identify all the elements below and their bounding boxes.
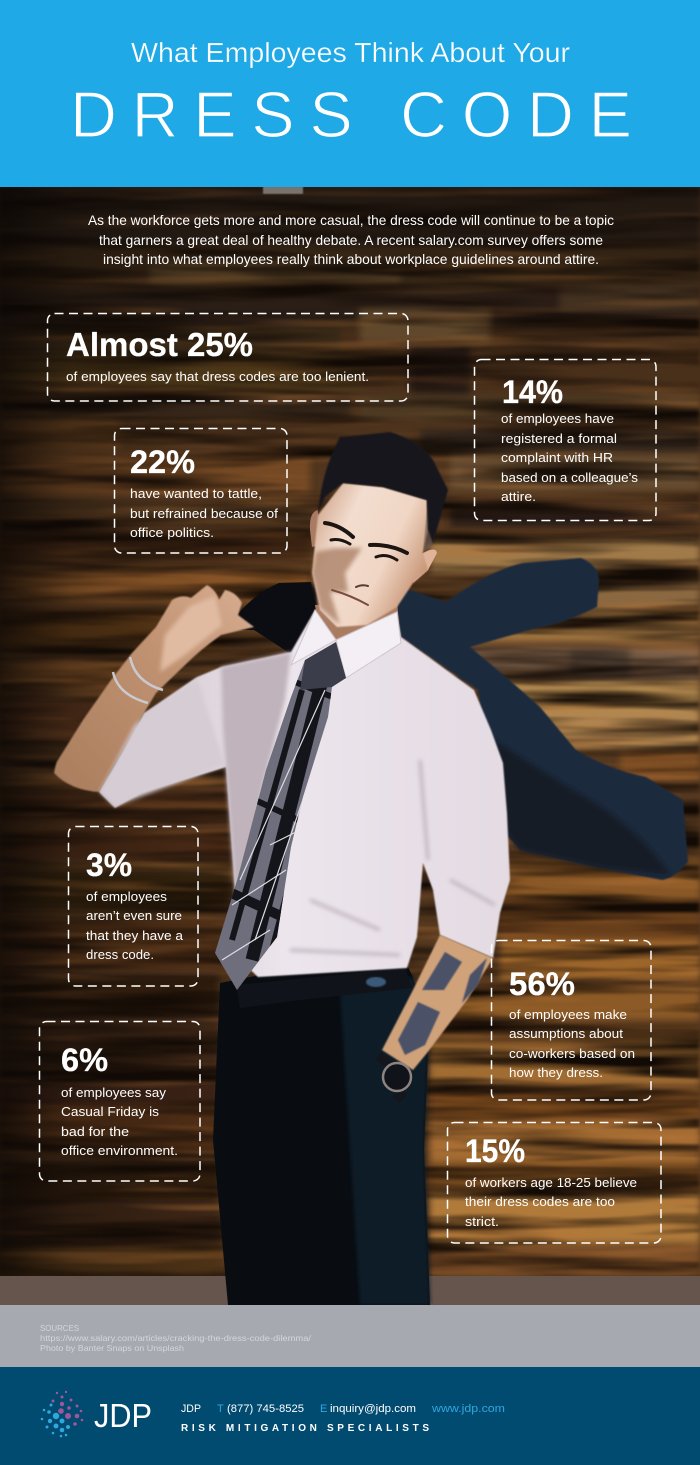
callout: 56%	[492, 940, 651, 1100]
callout: 14%: attire.	[501, 489, 536, 504]
contact line	[181, 1403, 505, 1415]
shaved side of head	[423, 500, 440, 553]
intro text: that garners a great deal of healthy debate. A recent salary.com survey offers some	[99, 232, 603, 248]
callout: 3%: aren’t even sure	[86, 908, 182, 923]
callout: 3%	[68, 826, 198, 986]
cheek shadow	[312, 548, 362, 625]
contact line: JDP	[181, 1403, 201, 1415]
callout: 15%: of workers age 18-25 believe	[465, 1175, 637, 1190]
face	[312, 483, 428, 627]
background photo: wooden wall	[0, 186, 700, 1305]
callout: 56%: 56%	[509, 966, 575, 1002]
jacket inner shadow	[494, 740, 670, 875]
neck	[315, 600, 401, 665]
callout: 56%: assumptions about	[509, 1026, 623, 1041]
tagline: RISK MITIGATION SPECIALISTS	[181, 1423, 429, 1434]
logo wordmark: JDP	[94, 1397, 152, 1434]
callout: 56%: co-workers based on	[509, 1046, 635, 1061]
callout: 56%: of employees make	[509, 1007, 627, 1022]
callout: 22%: have wanted to tattle,	[130, 486, 262, 501]
callout: 3%: dress code.	[86, 947, 154, 962]
callout: 22%	[114, 428, 287, 553]
hair	[318, 432, 448, 543]
title line: What Employees Think About Your	[131, 37, 570, 68]
sources panel	[0, 1305, 700, 1367]
callout: 22%: 22%	[130, 444, 195, 480]
header band	[0, 0, 700, 187]
callout: 3%: 3%	[86, 847, 132, 883]
upper left arm and hand	[54, 585, 254, 792]
tie	[215, 642, 346, 990]
callout: 3%: of employees	[86, 889, 168, 904]
callout: 6%: of employees say	[61, 1085, 167, 1100]
wristwatch	[378, 1056, 411, 1100]
shirt left shade	[221, 652, 291, 960]
callout: 6%	[40, 1022, 200, 1181]
sources panel: SOURCES	[40, 1323, 79, 1333]
sources panel: https://www.salary.com/articles/cracking-the-dress-code-dilemma/	[40, 1333, 312, 1343]
belt	[236, 968, 412, 1008]
callout: 6%: Casual Friday is	[61, 1104, 160, 1119]
contact line: www.jdp.com	[431, 1403, 505, 1415]
callout: almost 25%	[48, 314, 408, 401]
intro text	[88, 212, 614, 267]
intro text: insight into what employees really think about workplace guidelines around attire.	[103, 251, 599, 267]
callout: 14%: of employees have	[501, 411, 614, 426]
callout: 14%: complaint with HR	[501, 450, 613, 465]
callout: 6%: 6%	[61, 1042, 108, 1078]
contact line: E	[320, 1403, 327, 1415]
callout: 14%: based on a colleague’s	[501, 470, 639, 485]
callout: 14%: registered a formal	[501, 431, 617, 446]
callout: 15%: their dress codes are too	[465, 1194, 615, 1209]
rolled sleeve shade	[100, 679, 225, 806]
callout: 6%: office environment.	[61, 1143, 178, 1158]
left ear	[310, 510, 320, 547]
callout: almost 25%: of employees say that dress codes are too lenient.	[66, 369, 369, 384]
intro text: As the workforce gets more and more casual, the dress code will continue to be a topic	[88, 212, 614, 228]
callout: 15%: 15%	[465, 1133, 525, 1169]
shirt	[99, 610, 510, 977]
collar	[291, 610, 401, 678]
title: dress code: DRESS CODE	[70, 78, 632, 151]
tattoos	[398, 952, 487, 1055]
callout: 14%	[474, 360, 656, 520]
callout: 22%: but refrained because of	[130, 506, 278, 521]
callout: 56%: how they dress.	[509, 1065, 603, 1080]
shirt folds	[290, 760, 495, 955]
bracelets	[113, 657, 163, 703]
flying jacket	[397, 558, 688, 880]
callout: almost 25%: Almost 25%	[66, 326, 253, 363]
callout: 14%: 14%	[502, 374, 563, 410]
trousers	[213, 965, 430, 1305]
brows, eyes and mouth	[325, 523, 407, 605]
callout: 6%: bad for the	[61, 1124, 129, 1139]
right ear	[413, 550, 437, 583]
person: man with shirt, tie and jacket	[54, 432, 688, 1305]
contact line: inquiry@jdp.com	[330, 1403, 416, 1415]
contact line: (877) 745-8525	[227, 1403, 304, 1415]
callout: 15%	[448, 1122, 661, 1243]
contact line: T	[217, 1403, 224, 1415]
callout: 15%: strict.	[465, 1214, 499, 1229]
footer band	[0, 1367, 700, 1465]
sources panel: Photo by Banter Snaps on Unsplash	[40, 1343, 184, 1353]
callout: 22%: office politics.	[130, 525, 214, 540]
trouser right shading	[340, 977, 430, 1305]
right forearm with tattoos	[382, 935, 493, 1070]
hand highlight	[160, 596, 222, 672]
jacket collar held in hand	[225, 582, 318, 655]
icon: JDP dot logo	[41, 1391, 83, 1437]
callout: 3%: that they have a	[86, 928, 184, 943]
